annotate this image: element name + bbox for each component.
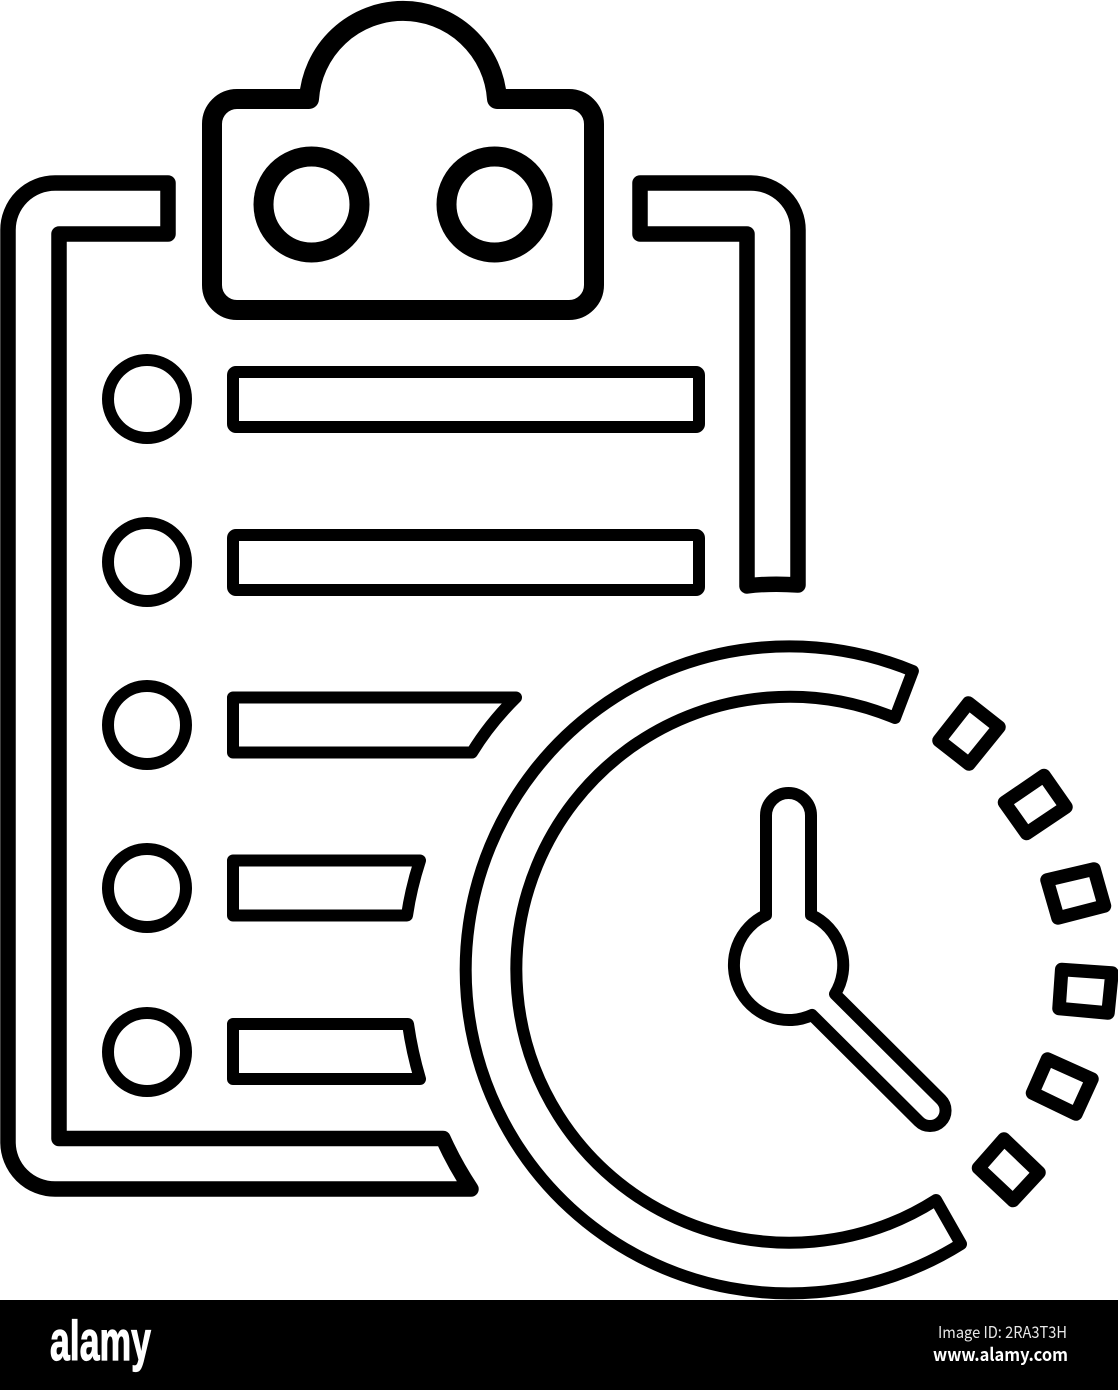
clock hands — [734, 793, 946, 1126]
icon: clock — [466, 646, 1112, 1293]
checklist row 3 — [108, 686, 516, 764]
checklist row 5 — [108, 1013, 420, 1091]
website: www.alamy.com — [933, 1342, 1068, 1367]
checklist row 1 — [108, 360, 699, 438]
clock ring — [466, 646, 961, 1293]
logo: alamy: alamy — [50, 1309, 151, 1372]
image id: Image ID: 2RA3T3H — [938, 1319, 1067, 1343]
clipboard board left and bottom — [8, 183, 471, 1189]
footer bar — [0, 1300, 1118, 1390]
checklist row 2 — [108, 523, 699, 601]
icon: clipboard — [8, 11, 798, 1189]
dashed clock segments — [939, 703, 1112, 1200]
clipboard clip — [212, 11, 594, 310]
checklist row 4 — [108, 849, 420, 927]
clipboard board right — [640, 183, 798, 586]
